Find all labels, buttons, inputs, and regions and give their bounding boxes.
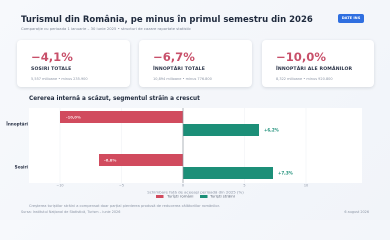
- date: 6 august 2026: [344, 210, 369, 214]
- subtitle: Comparație cu perioada 1 ianuarie – 30 iunie 2025 • structuri de cazare raportate statistic: [21, 27, 191, 31]
- axis tick labels: −5: [119, 184, 124, 188]
- axis tick labels: [56, 184, 308, 188]
- detail: innoptari: 10,894 milioane • minus 776.800: [153, 76, 212, 80]
- axis tick labels: 10: [304, 184, 308, 188]
- legend: Turiști români: [166, 194, 193, 199]
- label: romani: ÎNNOPTĂRI ALE ROMÂNILOR: [276, 67, 352, 72]
- bar: sosiri straini: [183, 167, 293, 179]
- bar: sosiri romani: [99, 154, 183, 166]
- detail: romani: 8,322 milioane • minus 920.800: [276, 76, 333, 80]
- footnote: Creșterea turiștilor străini a compensat doar parțial pierderea produsă de reducerea călătoriilor românilor.: [29, 204, 220, 208]
- bar: innoptari romani: [60, 111, 183, 123]
- category labels: Sosiri: [15, 164, 29, 170]
- panel: sosiri totale: [17, 40, 130, 87]
- panel: innoptari totale: [139, 40, 252, 87]
- axis title: Schimbare față de aceeași perioadă din 2025 (%): [147, 190, 244, 195]
- bar: innoptari straini: [183, 124, 279, 136]
- label: sosiri: SOSIRI TOTALE: [31, 67, 71, 72]
- axis tick labels: 5: [243, 184, 246, 188]
- value: innoptari: −6,7%: [153, 50, 195, 64]
- axis tick labels: −10: [56, 184, 64, 188]
- panel: innoptari romani: [262, 40, 374, 87]
- bar: innoptari straini: +6,2%: [264, 128, 279, 132]
- legend: [156, 194, 235, 199]
- value: sosiri: −4,1%: [31, 50, 73, 64]
- category labels: Înnoptări: [6, 122, 29, 126]
- category labels: [6, 122, 29, 170]
- legend: Turiști străini: [209, 194, 235, 199]
- bar: sosiri romani: -6,8%: [104, 158, 117, 162]
- value: romani: −10,0%: [276, 50, 326, 64]
- label: innoptari: ÎNNOPTĂRI TOTALE: [153, 67, 205, 72]
- bar: sosiri straini: +7,3%: [278, 170, 293, 176]
- title: Turismul din România, pe minus în primul semestru din 2026: [21, 15, 313, 25]
- axis tick labels: 0: [182, 184, 184, 188]
- bar: innoptari romani: -10,0%: [66, 114, 81, 120]
- source: Sursa: Institutul Național de Statistică, Turism – iunie 2026: [21, 210, 120, 214]
- chart heading: Cererea internă a scăzut, segmentul străin a crescut: [29, 96, 200, 102]
- detail: sosiri: 5,557 milioane • minus 235.900: [31, 76, 88, 80]
- badge: date INS: [338, 14, 364, 23]
- badge: date INS: DATE INS: [342, 16, 360, 20]
